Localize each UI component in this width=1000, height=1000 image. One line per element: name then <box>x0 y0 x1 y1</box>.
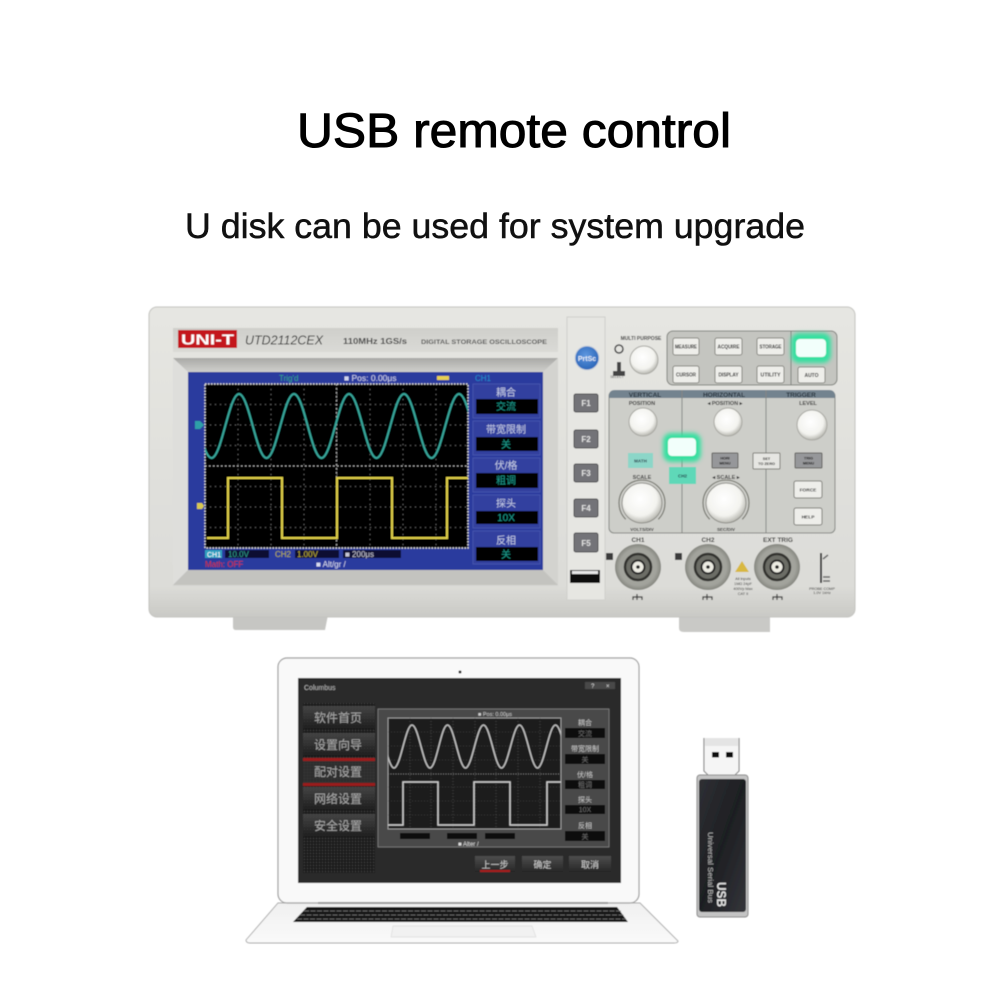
function button group: DISPLAY <box>718 372 739 378</box>
function button group: UTILITY <box>760 372 781 378</box>
button: force <box>794 481 822 498</box>
sidebar menu: 配对设置 <box>314 765 362 779</box>
drive body <box>697 775 748 917</box>
trackpad <box>391 926 536 937</box>
window controls: × <box>606 684 610 690</box>
button: trigger menu <box>795 453 822 468</box>
bottom readout: ■ 200μs <box>345 550 374 559</box>
knob: vertical position <box>629 408 657 436</box>
laptop <box>246 658 678 943</box>
drive label: USB: USB <box>714 882 729 907</box>
control panel: vertical, horizontal, trigger: SCALE <box>633 475 652 481</box>
bottom readout: CH1 <box>207 552 221 559</box>
bandwidth spec: 110MHz 1GS/s <box>343 337 408 346</box>
channel markers <box>195 421 204 509</box>
button: trigger menu: TRIG <box>804 456 813 460</box>
button: CH2 <box>669 467 696 484</box>
embedded softkey menu: 10X <box>579 807 592 814</box>
dialog buttons: 确定 <box>533 859 552 870</box>
app name: Columbus <box>304 685 336 692</box>
control panel: vertical, horizontal, trigger: VERTICAL <box>629 392 661 399</box>
logo: UNI-T <box>178 330 237 348</box>
warning triangle <box>735 561 749 572</box>
bottom readout: 1.00V <box>297 550 319 559</box>
softkey menu: 探头 <box>496 497 516 510</box>
F1 to F5 buttons: F2 <box>581 435 591 444</box>
oscilloscope <box>149 307 855 632</box>
PrtSc button <box>575 346 599 370</box>
multi-purpose control: MULTI PURPOSE <box>621 336 662 342</box>
connector: CH1 <box>615 544 661 590</box>
embedded sine wave <box>376 725 574 768</box>
sidebar menu <box>303 703 375 873</box>
button: set to zero: SET <box>763 457 771 461</box>
knob: seconds per div <box>706 483 746 523</box>
function button group <box>667 331 837 385</box>
warning text: CAT II <box>738 592 748 596</box>
embedded softkey menu: 探头 <box>578 795 592 804</box>
control panel: vertical, horizontal, trigger <box>609 390 835 533</box>
status bar: ■ Pos: 0.00μs <box>344 373 397 383</box>
laptop lid <box>278 658 639 903</box>
button: help: HELP <box>802 514 815 520</box>
softkey menu: 关 <box>501 438 511 451</box>
sidebar menu: 网络设置 <box>314 791 362 806</box>
USB port <box>570 570 600 583</box>
button: set to zero <box>753 453 780 469</box>
embedded readout: ■ Alter / <box>458 842 479 848</box>
embedded softkey menu: 关 <box>582 832 588 841</box>
button: math <box>628 453 653 468</box>
softkey menu: 伏/格 <box>495 459 517 472</box>
USB flash drive <box>697 738 748 917</box>
subtitle: U disk can be used for system upgrade <box>185 207 805 246</box>
sidebar menu: 设置向导 <box>314 737 362 752</box>
F1 to F5 buttons: F5 <box>581 539 591 548</box>
warning text: All Inputs <box>735 577 751 581</box>
connector: CH2 <box>685 544 731 590</box>
multi-purpose control: SELECT <box>610 375 625 379</box>
warning text: 400Vp Max <box>733 587 753 591</box>
bottom readout: ■ Alt/gr / <box>316 560 347 569</box>
button: math: MATH <box>634 458 647 464</box>
CH1 sine wave <box>184 394 486 458</box>
sidebar menu: 软件首页 <box>314 711 362 725</box>
function button group: MEASURE <box>675 344 698 350</box>
embedded scope panel <box>376 709 609 848</box>
button: trigger menu: MENU <box>803 462 814 466</box>
control panel: vertical, horizontal, trigger: ◂ SCALE ▸ <box>711 475 741 481</box>
control panel: vertical, horizontal, trigger: ◂ POSITION ▸ <box>707 401 744 407</box>
softkey menu: 反相 <box>496 534 516 547</box>
bottom readout: CH2 <box>275 550 292 559</box>
embedded softkey menu: 反相 <box>578 821 592 830</box>
input connectors: EXT TRIG <box>763 537 793 544</box>
embedded softkey menu: 伏/格 <box>577 770 593 779</box>
warning text <box>733 577 753 596</box>
warning text: 1MΩ 24pF <box>734 582 753 586</box>
control panel: vertical, horizontal, trigger: HORIZONTAL <box>703 392 745 399</box>
title: USB remote control <box>297 105 731 158</box>
instrument body <box>149 307 855 617</box>
dialog buttons: 取消 <box>581 859 599 870</box>
embedded plot <box>376 718 574 829</box>
hinge shadow <box>318 902 608 904</box>
button: CH2: CH2 <box>678 474 687 478</box>
bottom readout: 10.0V <box>228 550 250 559</box>
control panel: vertical, horizontal, trigger: POSITION <box>629 401 655 407</box>
softkey menu <box>473 384 540 564</box>
glowing CH1 button <box>663 433 701 462</box>
channel indicator squares <box>606 553 682 560</box>
F1 to F5 buttons: F4 <box>581 504 591 513</box>
control panel: vertical, horizontal, trigger: TRIGGER <box>786 392 816 399</box>
input connectors: CH2 <box>701 537 715 544</box>
foot: right <box>679 615 770 632</box>
embedded square wave <box>388 782 561 825</box>
glowing run button <box>791 333 831 363</box>
knob: horizontal position <box>714 408 742 436</box>
window controls: ? <box>591 684 595 690</box>
softkey column <box>567 317 605 600</box>
foot: left <box>233 615 328 630</box>
product type: DIGITAL STORAGE OSCILLOSCOPE <box>421 339 548 346</box>
knob: trigger level <box>797 410 827 440</box>
scale knob rings <box>619 480 749 519</box>
bottom readout <box>205 550 401 569</box>
embedded softkey menu: 交流 <box>578 729 592 738</box>
logo: UNI-T: UNI-T <box>181 332 234 348</box>
PrtSc button: PrtSc <box>578 356 596 363</box>
USB connector <box>704 738 739 775</box>
webcam <box>458 670 462 674</box>
button: set to zero: TO ZERO <box>758 462 775 466</box>
status bar <box>279 373 492 383</box>
button: horizontal menu: HORI <box>720 456 730 460</box>
control panel: vertical, horizontal, trigger: VOLTS/DIV <box>630 527 654 532</box>
CH2 square wave <box>207 478 468 538</box>
function button group: STORAGE <box>760 344 782 350</box>
sidebar menu: 安全设置 <box>314 818 362 833</box>
F1 to F5 buttons: F1 <box>581 399 591 408</box>
softkey menu: 耦合 <box>496 386 516 399</box>
probe compensation terminals: PROBE COMP <box>809 587 835 591</box>
button: horizontal menu: MENU <box>719 462 731 466</box>
embedded softkey menu: 带宽限制 <box>571 744 599 753</box>
dialog buttons: 上一步 <box>481 860 509 870</box>
status bar: CH1 <box>475 374 492 383</box>
input connectors: CH1 <box>631 537 645 544</box>
control panel: vertical, horizontal, trigger: LEVEL <box>799 401 817 407</box>
function button group: ACQUIRE <box>718 344 740 350</box>
keyboard <box>293 907 628 922</box>
screen bezel <box>173 358 558 586</box>
embedded softkey menu <box>565 718 605 841</box>
embedded softkey menu: 关 <box>582 755 588 764</box>
oscilloscope screen <box>184 372 543 570</box>
plot area <box>184 384 486 548</box>
header band <box>173 328 558 352</box>
status bar: Trig'd <box>279 374 298 383</box>
function button group: CURSOR <box>676 372 696 378</box>
button: force: FORCE <box>800 488 817 494</box>
embedded scope panel: ■ Pos: 0.00μs <box>478 712 512 718</box>
softkey menu: 交流 <box>496 400 516 413</box>
connector: EXT TRIG <box>754 544 800 590</box>
drive label: Universal Serial Bus: Universal Serial Bus <box>706 832 715 903</box>
knob: volts per div <box>622 483 662 523</box>
F1 to F5 buttons: F3 <box>581 469 591 478</box>
softkey menu: 带宽限制 <box>486 423 526 436</box>
laptop screen <box>298 678 621 883</box>
probe compensation terminals: 1.0V 1kHz <box>813 591 831 595</box>
dialog buttons <box>475 856 611 872</box>
embedded readout <box>400 833 515 848</box>
probe compensation terminals <box>809 553 835 595</box>
multi-purpose control <box>610 336 662 379</box>
softkey menu: 10X <box>497 513 515 524</box>
control panel: vertical, horizontal, trigger: SEC/DIV <box>717 527 735 532</box>
softkey menu: 关 <box>501 548 511 561</box>
button: horizontal menu <box>712 453 738 468</box>
button: help <box>794 508 822 525</box>
function button group: AUTO <box>804 373 819 379</box>
input connectors <box>606 537 835 600</box>
bottom readout: Math: OFF <box>205 560 243 569</box>
embedded softkey menu: 耦合 <box>578 718 592 727</box>
model name: UTD2112CEX <box>245 332 324 348</box>
softkey menu: 粗调 <box>496 475 516 487</box>
laptop base <box>246 903 678 943</box>
ground symbols <box>633 594 782 600</box>
window controls <box>585 682 615 690</box>
embedded softkey menu: 粗调 <box>578 780 592 789</box>
F1 to F5 buttons <box>574 394 598 552</box>
